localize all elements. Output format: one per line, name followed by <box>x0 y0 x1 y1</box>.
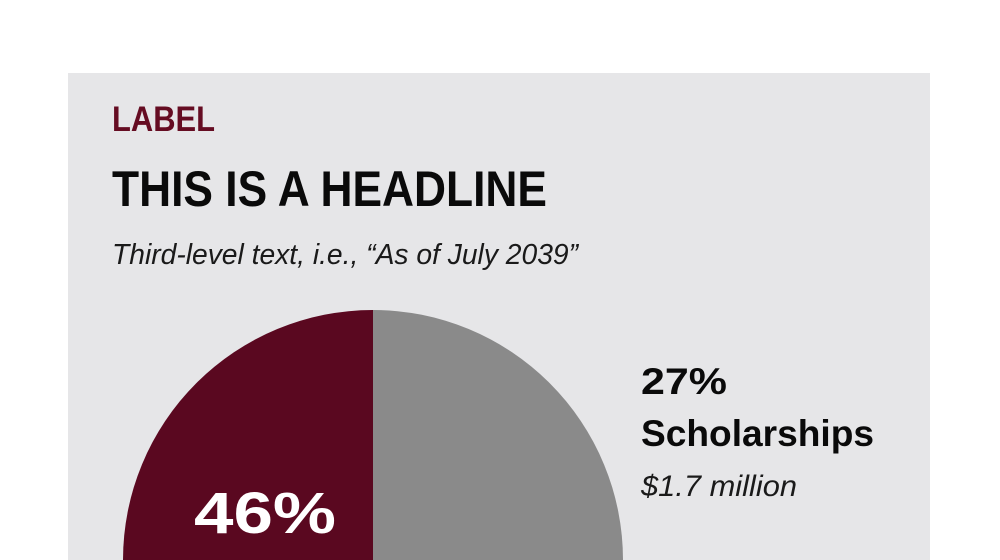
title: THIS IS A HEADLINE <box>112 161 547 217</box>
slice: 46% <box>123 310 373 560</box>
callout: scholarships: Scholarships <box>641 413 874 454</box>
callout: scholarships: $1.7 million <box>640 470 797 503</box>
label: LABEL <box>112 100 215 139</box>
callout: scholarships <box>640 361 874 503</box>
value label 46%: 46% <box>194 481 336 546</box>
callout: scholarships: 27% <box>641 361 727 402</box>
panel: background <box>68 73 930 560</box>
pie chart <box>123 310 623 560</box>
slice: 27% <box>373 310 623 560</box>
subtitle: Third-level text, i.e., “As of July 2039” <box>112 239 579 271</box>
